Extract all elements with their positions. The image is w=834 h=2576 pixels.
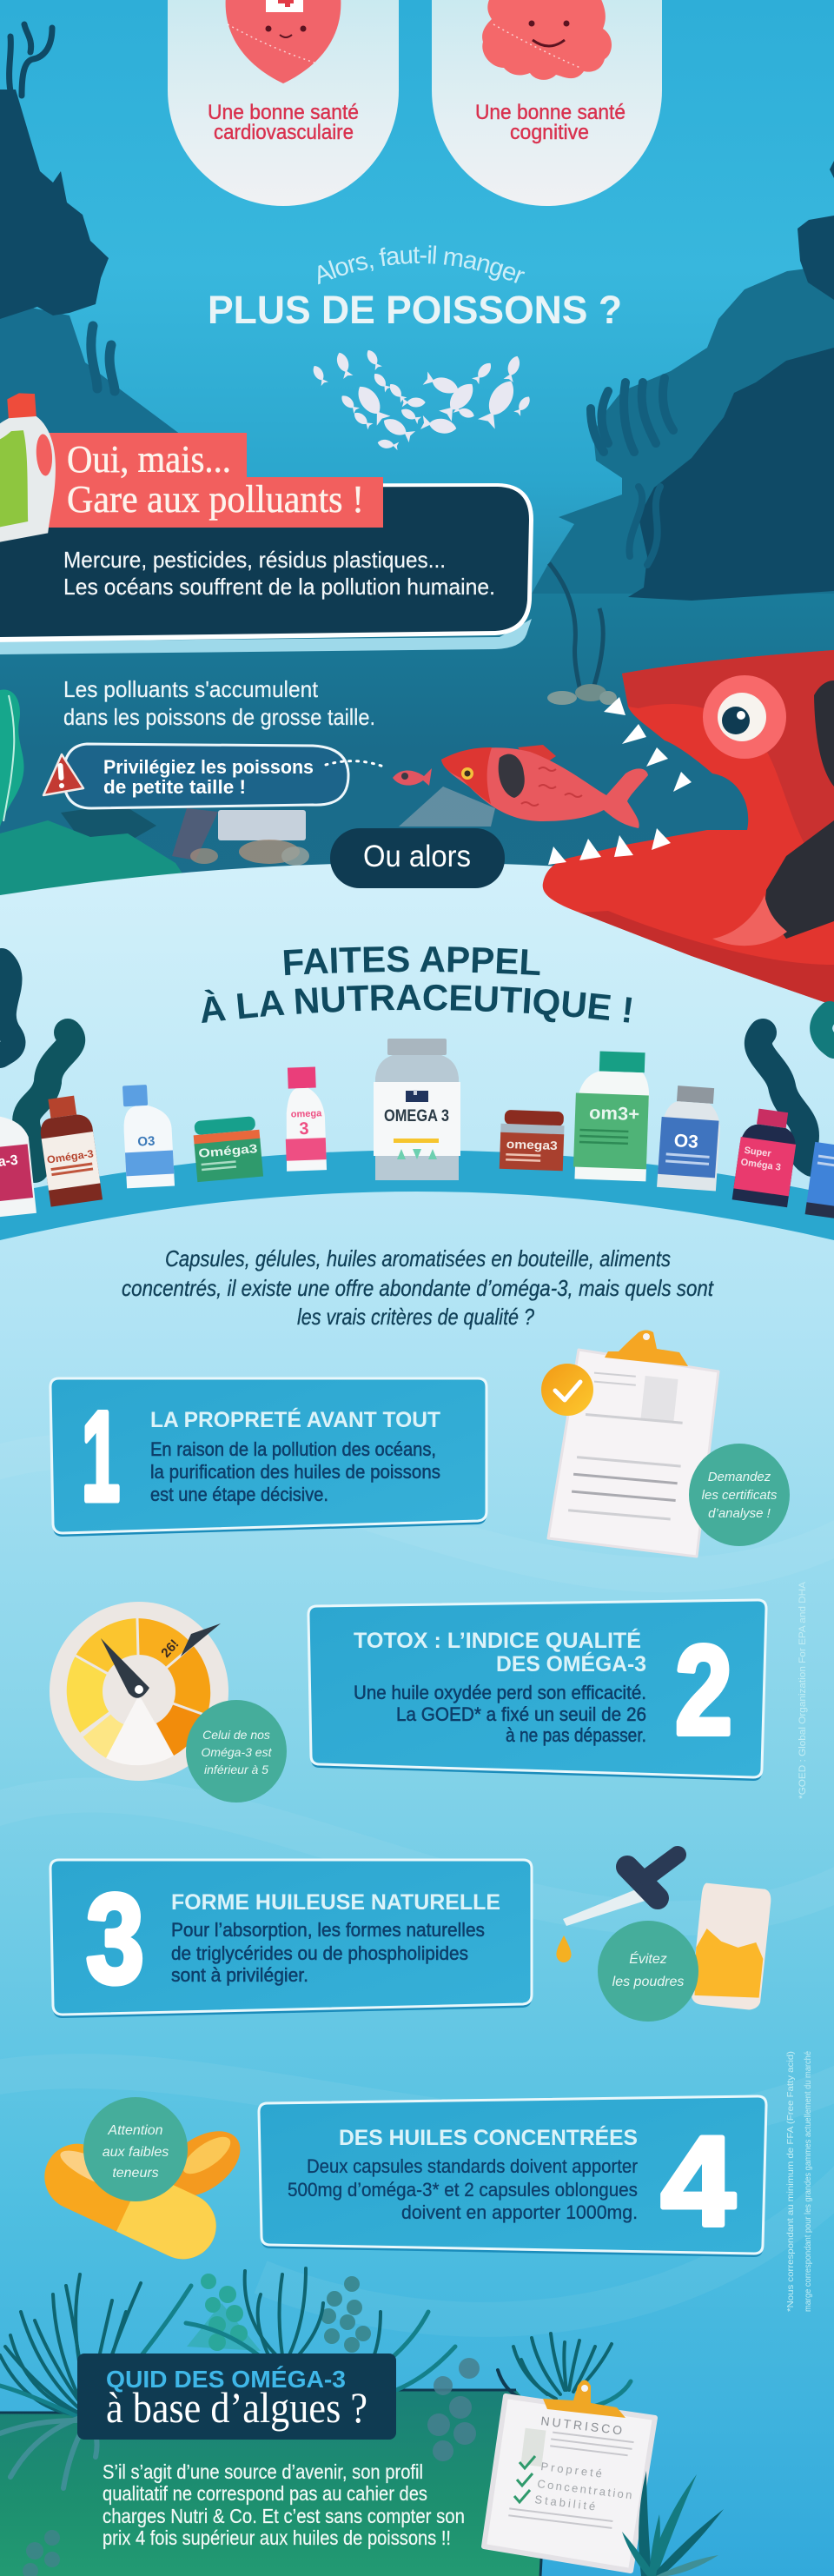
bottle: blue O3: O3 [673,1131,699,1152]
gauge [50,1602,228,1781]
shelf arc [0,1151,834,1240]
background: mid-teal rock left [0,307,187,521]
text: algae body: qualitatif ne correspond pas au cahier des [103,2482,427,2505]
footnote: GOED: *GOED : Global Organization For EPA and DHA [798,1581,808,1799]
water ripples [0,1451,834,2320]
background: sea floor [0,594,834,906]
text: mercury: Les océans souffrent de la pollution humaine. [63,574,495,600]
text: algae body: S’il s’agit d’une source d’avenir, son profil [103,2460,423,2483]
callout: celui de nos: Oméga-3 est [202,1745,273,1759]
callout: demandez: Demandez [708,1470,771,1484]
number 3: 3 [86,1868,144,2009]
body text: doivent en apporter 1000mg. [401,2201,638,2223]
number 4: 4 [661,2110,735,2252]
button: ou alors: Ou alors [363,840,471,873]
seaweed stalk and rocks [547,563,617,705]
callout: demandez [689,1444,790,1546]
green panel: algae [0,2390,546,2576]
bottle: right edge blue [805,1142,834,1220]
bottle: pink omega 3: omega [291,1108,322,1120]
bottles row [0,1039,834,1220]
text: polluants accumulate: dans les poissons de grosse taille. [63,704,375,730]
text: polluants accumulate: Les polluants s'accumulent [63,676,319,702]
number 2: 2 [675,1619,732,1761]
callout: small fish [43,744,348,808]
fish teeth [548,697,692,865]
body text: 500mg d’oméga-3* et 2 capsules oblongues [288,2179,638,2201]
body text: sont à privilégier. [171,1964,308,1986]
panel: criterion 2 [308,1600,766,1781]
pill: cognitive [432,0,662,206]
clipboard checks [514,2456,535,2502]
footnote: FFA: *Nous correspondant au minimum de FFA (Free Fatty acid) [786,2051,796,2312]
body text: Une huile oxydée perd son efficacité. [354,1682,646,1703]
title: nutraceutique [202,946,632,1023]
clipboard list [534,2460,635,2513]
callout: évitez: Évitez [629,1950,667,1967]
title: plus de poissons: PLUS DE POISSONS ? [208,288,622,332]
bottle: super omega 3: Oméga 3 [740,1157,782,1173]
seaweed left of products [0,960,71,1169]
background: upper water [0,0,834,600]
bottle: brown omega-3 [36,1093,103,1207]
bottle: large central omega 3 [374,1039,460,1180]
title: nutraceutique: FAITES APPEL [283,946,540,975]
coral silhouette left [0,24,115,391]
bottle: green om3+: om3+ [589,1103,639,1125]
title: nutraceutique: À LA NUTRACEUTIQUE ! [202,984,632,1023]
seaweed tuft bottom right [622,2471,724,2576]
panel: polluants [0,483,533,654]
bottom-left debris and green rocks [0,689,309,895]
icon: tiny fish [393,768,432,786]
subtitle: curved: Alors, faut-il manger [318,245,525,285]
fish school [311,349,533,450]
paragraph: quality criteria: les vrais critères de qualité ? [297,1304,534,1330]
heading: DES HUILES CONCENTRÉES [339,2125,638,2150]
body text: à ne pas dépasser. [506,1724,646,1746]
body text: est une étape décisive. [150,1484,328,1505]
text: algae body: charges Nutri & Co. Et c’est sans compter son [103,2505,465,2527]
seaweed right of products [758,1012,834,1163]
paragraph: quality criteria: concentrés, il existe une offre abondante d’oméga-3, mais quels sont [122,1275,715,1301]
callout: celui de nos: Celui de nos [202,1728,270,1742]
panel: criterion 1 [50,1378,486,1537]
number 1: 1 [82,1385,120,1527]
bottle: brown omega-3: Oméga-3 [46,1147,95,1166]
icon: medium fish [441,745,648,828]
panel: criterion 3 [50,1860,532,2018]
bottle: white O3: O3 [137,1134,156,1150]
body text: la purification des huiles de poissons [150,1461,440,1483]
background: mid-teal rock right [532,265,834,594]
bottle: white O3 [122,1084,175,1188]
callout: celui de nos: inférieur à 5 [204,1763,268,1776]
pale hill [0,862,834,2576]
label: cognitive: cognitive [510,121,589,144]
label: oui, mais: Oui, mais... [67,438,231,481]
icon: capsules [34,2118,252,2270]
clipboard list: Stabilité [534,2493,599,2513]
callout: évitez: les poudres [612,1975,684,1989]
title box: algues [77,2354,396,2440]
text: mercury: Mercure, pesticides, résidus plastiques... [63,547,446,573]
body text: de triglycérides ou de phospholipides [171,1942,468,1964]
heading: DES OMÉGA-3 [496,1651,646,1676]
paragraph: quality criteria: Capsules, gélules, huiles aromatisées en bouteille, aliments [165,1245,671,1271]
icon: big red fish [543,650,834,1006]
panel: criterion 4 [259,2096,766,2257]
bottle: large central omega 3: OMEGA 3 [384,1107,449,1125]
body text: Pour l’absorption, les formes naturelles [171,1919,485,1941]
coral silhouette right [591,161,834,601]
heading: LA PROPRETÉ AVANT TOUT [150,1407,440,1432]
label: oui, mais [43,433,383,528]
callout: attention: teneurs [112,2166,159,2181]
callout: demandez: les certificats [702,1488,778,1503]
body text: En raison de la pollution des océans, [150,1438,436,1460]
callout: évitez [598,1921,698,2022]
callout: attention: Attention [107,2123,163,2138]
bottle: super omega 3 [732,1106,800,1207]
jar: green omega3 [192,1116,263,1182]
clipboard list: Propreté [540,2460,606,2480]
bottle: super omega 3: Super [744,1145,772,1159]
text: algae body: prix 4 fois supérieur aux huiles de poissons !! [103,2526,451,2549]
icon: detergent bottle [0,391,61,543]
bottle: blue O3 [657,1085,723,1192]
gauge label 26: 26! [158,1637,182,1661]
label: cardiovascular: Une bonne santé [208,101,359,124]
title box: algues: à base d’algues ? [106,2383,367,2432]
bottle: pink omega 3: 3 [299,1119,309,1139]
body text: La GOED* a fixé un seuil de 26 [396,1703,646,1725]
button: ou alors [330,828,505,888]
callout: attention [83,2097,188,2201]
clipboard list: Concentration [537,2477,635,2502]
dotted line [326,761,386,767]
icon: heart character [226,0,341,83]
seaweed tufts [0,2268,631,2488]
label: cardiovascular: cardiovasculaire [214,121,354,144]
heading: TOTOX : L’INDICE QUALITÉ [354,1628,641,1653]
jar: brown omega3: omega3 [506,1137,558,1152]
clipboard: nutrisco [484,2380,655,2571]
callout: small fish: de petite taille ! [103,776,246,798]
jar: green omega3: Oméga3 [198,1141,258,1160]
callout: small fish: Privilégiez les poissons [103,756,314,778]
title box: algues: QUID DES OMÉGA-3 [106,2366,346,2393]
gauge needles [101,1623,221,1698]
heading: FORME HUILEUSE NATURELLE [171,1890,500,1915]
plastic bag [399,787,495,827]
jar: brown omega3 [500,1110,565,1171]
icon: dropper and jar [556,1855,772,2011]
algae flowers [23,2274,480,2576]
callout: attention: aux faibles [103,2145,169,2160]
callout: demandez: d’analyse ! [708,1506,771,1521]
bottle: pink omega 3 [283,1066,327,1172]
icon: certificate clipboard [541,1330,718,1557]
icon: warning triangle [43,754,83,795]
bottle: green om3+ [573,1051,651,1181]
body text: Deux capsules standards doivent apporter [307,2155,638,2177]
icon: brain character [482,0,612,80]
clipboard title: NUTRISCO [540,2413,626,2438]
callout: celui de nos [186,1700,287,1803]
pill: cardiovascular [168,0,399,206]
bottle: left edge pink [0,1113,36,1219]
footnote: FFA: marge correspondant pour les grandes gammes actuellement du marché [804,2051,813,2312]
label: cognitive: Une bonne santé [475,101,626,124]
label: oui, mais: Gare aux polluants ! [67,478,364,521]
